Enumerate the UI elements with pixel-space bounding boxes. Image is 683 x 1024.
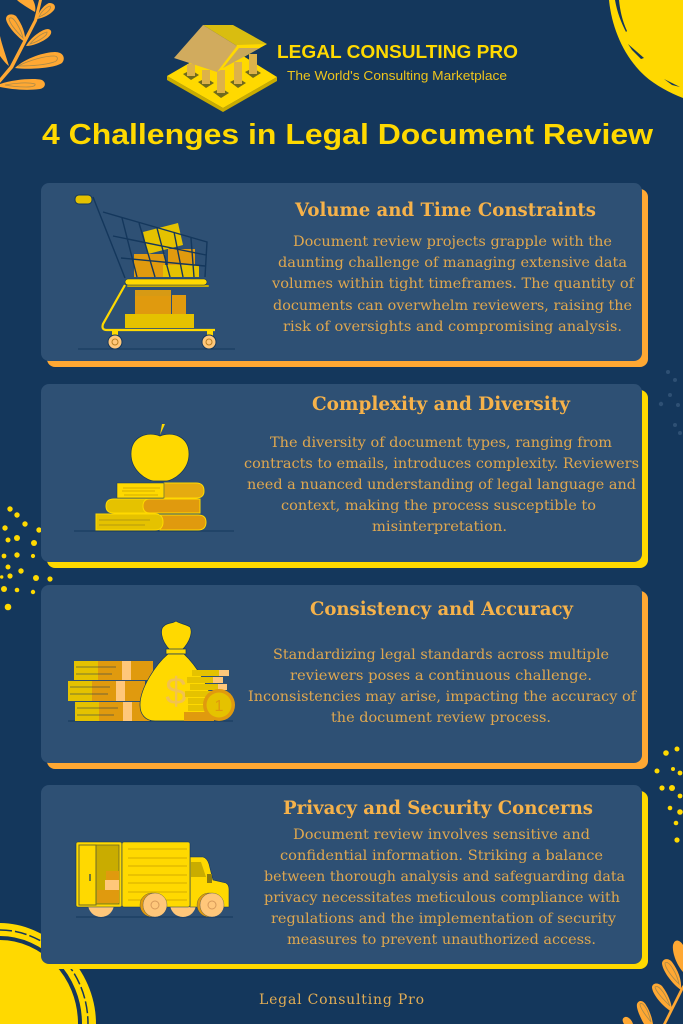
decoration: yellow dots right: [654, 746, 683, 843]
heading 2: Complexity and Diversity: [312, 393, 571, 415]
text block 3: the document review process.: [331, 710, 551, 726]
decoration: bottom-right leaf branch: [623, 940, 683, 1024]
text block 4: privacy necessitates meticulous compliance with: [264, 890, 620, 906]
decoration: bottom-left yellow circle: [0, 923, 96, 1024]
text block 3: reviewers poses a continuous challenge.: [290, 668, 592, 684]
panel 3 background: [41, 585, 648, 769]
decoration: yellow dots left: [0, 506, 53, 610]
decoration: top-right yellow circle: [609, 0, 683, 98]
text block 2: [244, 435, 639, 535]
logo: courthouse icon: [167, 25, 277, 112]
decoration: top-left leaf branch: [0, 0, 64, 90]
text block 2: need a nuanced understanding of legal language and: [247, 477, 636, 493]
text block 4: [264, 827, 625, 948]
icon: apple on books: [74, 424, 234, 531]
text block 3: [248, 647, 638, 726]
icon: money bag with cash and coins: [68, 621, 235, 721]
icon: money bag with cash and coins: $: [165, 671, 187, 713]
text block 4: regulations and the implementation of security: [271, 911, 616, 927]
icon: delivery truck: [76, 842, 233, 917]
text block 1: daunting challenge of managing extensive data: [278, 255, 627, 271]
text block 2: misinterpretation.: [372, 519, 507, 535]
text block 3: Standardizing legal standards across multiple: [273, 647, 609, 663]
heading 4: Privacy and Security Concerns: [283, 797, 593, 819]
text block 3: Inconsistencies may arise, impacting the accuracy of: [248, 689, 638, 705]
icon: shopping cart: [75, 195, 235, 349]
text block 4: between thorough analysis and safeguarding data: [264, 869, 625, 885]
text block 4: measures to prevent unauthorized access.: [287, 932, 596, 948]
panel 2: complexity and diversity: [41, 384, 648, 568]
icon: money bag with cash and coins: 1: [215, 698, 224, 715]
logo name: LEGAL CONSULTING PRO: [277, 42, 518, 62]
title: 4 Challenges in Legal Document Review: [42, 119, 654, 151]
footer: Legal Consulting Pro: [259, 992, 424, 1008]
text block 1: Document review projects grapple with the: [293, 234, 612, 250]
text block 4: confidential information. Striking a balance: [280, 848, 603, 864]
heading 3: Consistency and Accuracy: [310, 598, 574, 620]
panel 1: volume and time constraints: [41, 183, 648, 367]
logo tagline: The World's Consulting Marketplace: [287, 68, 507, 83]
text block 2: The diversity of document types, ranging from: [270, 435, 612, 451]
heading 1: Volume and Time Constraints: [294, 199, 596, 221]
text block 4: Document review involves sensitive and: [293, 827, 590, 843]
text block 1: risk of oversights and compromising analysis.: [283, 319, 622, 335]
panel 4: privacy and security concerns: [41, 785, 648, 969]
text block 2: contracts to emails, introduces complexity. Reviewers: [244, 456, 639, 472]
text block 1: documents can overwhelm reviewers, raising the: [273, 298, 632, 314]
panel 4 background: [41, 785, 648, 969]
panel 2 background: [41, 384, 648, 568]
panel 1 background: [41, 183, 648, 367]
text block 2: context, making the process susceptible to: [281, 498, 596, 514]
text block 1: volumes within tight timeframes. The quantity of: [271, 276, 636, 292]
panel 3: consistency and accuracy: [41, 585, 648, 769]
decoration: faint dots right: [659, 370, 682, 435]
text block 1: [271, 234, 636, 335]
